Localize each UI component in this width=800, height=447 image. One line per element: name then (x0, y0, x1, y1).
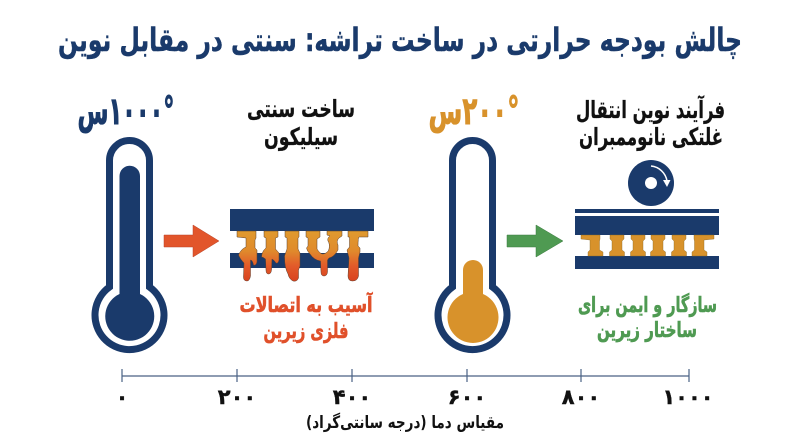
safe caption: ساختار زیرین (597, 318, 697, 342)
axis labels: ۰ (116, 385, 128, 409)
damage caption: آسیب به اتصالات (240, 292, 373, 317)
safe caption: سازگار و ایمن برای (578, 292, 717, 317)
diagram: intact chip layers (575, 209, 719, 269)
temperature label: 1000: ۱۰۰۰°س (77, 89, 174, 133)
axis labels: ۲۰۰ (218, 385, 256, 409)
icon: roller (628, 160, 674, 206)
axis caption: مقیاس دما (درجه سانتی‌گراد) (306, 412, 504, 433)
heading: traditional silicon fabrication (247, 95, 355, 151)
axis labels: ۴۰۰ (333, 385, 371, 409)
diagram: melted chip layers (230, 209, 374, 281)
heading: traditional silicon fabrication: ساخت سنتی (247, 95, 355, 123)
arrow: red (164, 225, 219, 257)
icon: cool thermometer (438, 141, 507, 350)
axis labels: ۶۰۰ (448, 385, 486, 409)
damage caption: فلزی زیرین (264, 319, 348, 343)
axis labels (116, 385, 714, 409)
heading: modern nanomembrane roller transfer (576, 95, 725, 151)
heading: traditional silicon fabrication: سیلیکون (264, 123, 338, 151)
temperature label: 200: ۲۰۰°س (428, 89, 520, 133)
heading: modern nanomembrane roller transfer: فرآیند نوین انتقال (576, 95, 725, 124)
arrow: green (507, 225, 563, 257)
icon: hot thermometer (95, 141, 164, 350)
axis labels: ۱۰۰۰ (662, 385, 714, 409)
safe caption (578, 292, 717, 342)
axis line and ticks (122, 369, 689, 382)
panel: modern process (428, 89, 725, 350)
axis labels: ۸۰۰ (562, 385, 600, 409)
damage caption (240, 292, 373, 343)
temperature scale (116, 369, 714, 433)
panel: traditional process (77, 89, 374, 350)
heading: modern nanomembrane roller transfer: غلتکی نانوممبران (579, 123, 723, 151)
